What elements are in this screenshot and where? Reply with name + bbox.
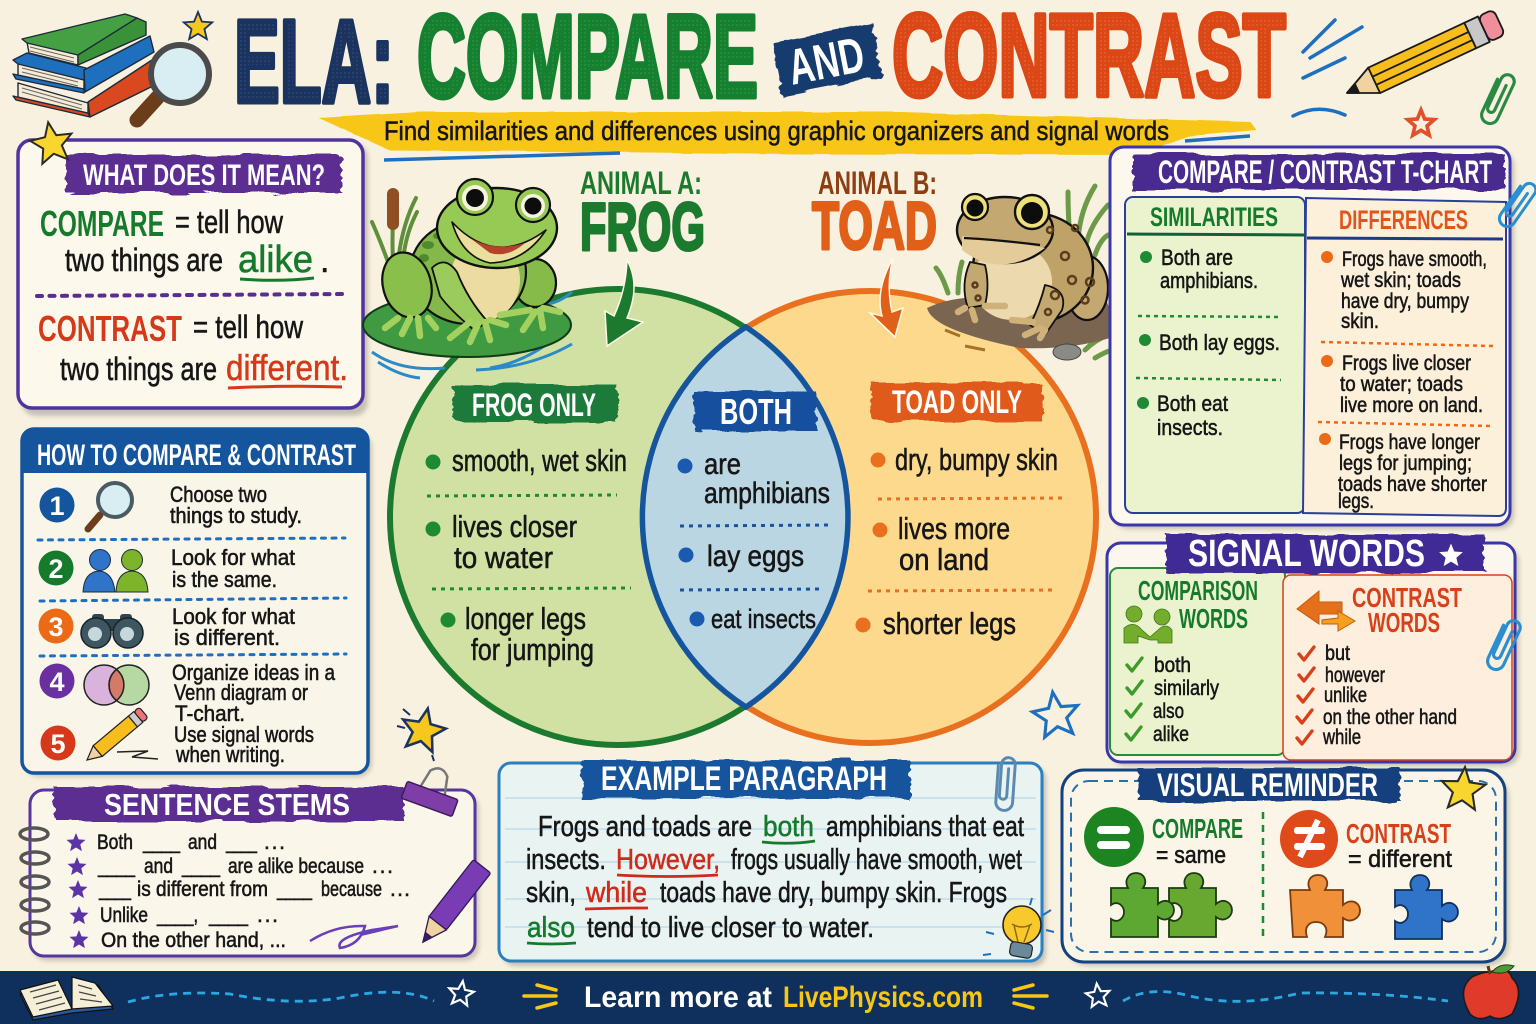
footer bar	[0, 971, 1536, 1024]
step 2: Look for what	[171, 545, 295, 570]
column: comparison words	[1110, 568, 1285, 755]
illustration: toad on rock	[927, 194, 1112, 360]
circle: toad	[644, 291, 1096, 743]
column: similarities: Both lay eggs.	[1159, 330, 1280, 355]
contrast side: CONTRAST	[1346, 818, 1451, 849]
both list: are	[704, 448, 741, 481]
step 4: T-chart.	[175, 701, 245, 726]
frog list: to water	[454, 540, 553, 575]
heading: animal B toad: ANIMAL B:	[818, 165, 937, 201]
heading: sentence stems: SENTENCE STEMS	[104, 787, 350, 822]
step 4	[40, 660, 336, 726]
definition: compare	[40, 203, 329, 281]
step 2	[38, 545, 295, 592]
stem list: ____	[276, 878, 312, 901]
step 2: 2	[48, 554, 64, 584]
contrast side	[1280, 810, 1458, 939]
column: comparison words: also	[1153, 700, 1184, 723]
frog list: longer legs	[465, 601, 586, 636]
both list: amphibians	[704, 477, 830, 510]
both list: lay eggs	[707, 540, 804, 573]
both list	[678, 448, 832, 634]
column: comparison words: WORDS	[1179, 603, 1248, 634]
toad list	[856, 442, 1066, 641]
icon: light bulb	[983, 898, 1054, 959]
column: differences: Frogs live closer	[1342, 352, 1471, 375]
column: contrast words: on the other hand	[1323, 706, 1457, 729]
column: differences: to water; toads	[1340, 373, 1463, 396]
icon: small venn diagram	[84, 665, 149, 705]
stem list: ____,	[156, 904, 198, 927]
motion strokes	[1293, 20, 1362, 116]
stem list: Unlike	[100, 904, 148, 927]
definition: compare: COMPARE	[40, 203, 164, 244]
label: toad only: TOAD ONLY	[892, 384, 1022, 420]
icon: yellow star on reminder	[1440, 765, 1487, 810]
paragraph text: also	[527, 912, 575, 944]
toad list: dry, bumpy skin	[895, 442, 1058, 477]
icon: green paperclip	[1479, 71, 1516, 126]
paragraph text: Frogs and toads are	[538, 811, 752, 843]
column: differences: DIFFERENCES	[1339, 205, 1468, 235]
compare side	[1084, 807, 1243, 937]
column: contrast words	[1283, 575, 1512, 760]
frog list	[426, 443, 631, 667]
compare side: = same	[1156, 842, 1226, 869]
title badge: AND: AND	[784, 26, 869, 96]
stem list: ...	[264, 831, 285, 854]
definition: contrast: CONTRAST	[38, 308, 182, 349]
stem list: ...	[257, 904, 278, 927]
both list: eat insects	[711, 604, 816, 634]
column: differences: live more on land.	[1340, 394, 1483, 417]
toad list: shorter legs	[883, 606, 1016, 641]
heading: visual reminder: VISUAL REMINDER	[1157, 767, 1378, 803]
step 4: Organize ideas in a	[172, 660, 336, 685]
column: differences: legs for jumping;	[1339, 452, 1472, 475]
subtitle band: Find similarities and differences using graphic organizers and signal words	[384, 116, 1169, 146]
column: differences: have dry, bumpy	[1341, 290, 1469, 313]
label: both: BOTH	[720, 391, 792, 432]
heading: signal words: SIGNAL WORDS	[1188, 533, 1425, 575]
definition: compare: .	[320, 242, 329, 280]
scribble	[310, 926, 398, 948]
circle: frog	[390, 289, 846, 745]
step 5	[40, 707, 314, 767]
column: similarities: Both are	[1161, 245, 1233, 270]
heading: what does it mean: WHAT DOES IT MEAN?	[83, 159, 325, 192]
step 3: 3	[48, 612, 64, 642]
step 1	[40, 482, 302, 529]
column: comparison words: COMPARISON	[1138, 575, 1258, 606]
icon: green puzzle pieces	[1111, 873, 1232, 937]
heading: how to compare	[22, 429, 368, 473]
paragraph text: insects.	[526, 844, 606, 876]
grass behind toad	[936, 186, 1112, 358]
definition: compare: = tell how	[175, 204, 284, 240]
column: similarities	[1125, 197, 1305, 513]
paragraph text: tend to live closer to water.	[587, 912, 874, 944]
title	[234, 0, 1286, 128]
stem list: ____	[225, 831, 257, 854]
stem list: ____	[181, 855, 220, 878]
heading: how to compare: HOW TO COMPARE & CONTRAST	[37, 439, 356, 472]
paragraph text: both	[763, 811, 814, 843]
stem list: are alike because	[228, 855, 364, 878]
icon: handshake people	[1124, 606, 1172, 643]
toad list: on land	[899, 542, 989, 577]
icon: opposite arrows	[1297, 591, 1355, 631]
frog list: smooth, wet skin	[452, 443, 627, 478]
panel: sentence stems	[20, 787, 479, 961]
column: differences: legs.	[1338, 490, 1374, 513]
definition: contrast: different.	[226, 347, 348, 388]
step 2: is the same.	[172, 567, 277, 592]
step 5: when writing.	[175, 742, 285, 767]
icon: two people	[83, 550, 148, 592]
column: contrast words: unlike	[1324, 684, 1367, 707]
illustration: frog on lily pad	[363, 179, 572, 378]
step 3	[38, 604, 295, 650]
column: differences: skin.	[1341, 310, 1379, 333]
contrast side: = different	[1348, 846, 1452, 873]
definition: compare: alike	[238, 239, 313, 281]
column: differences: Frogs have longer	[1339, 431, 1480, 454]
paragraph text: frogs usually have smooth, wet	[731, 844, 1022, 876]
icon: white star left	[447, 979, 475, 1006]
heading: animal A frog: ANIMAL A:	[580, 165, 702, 201]
stem list: On the other hand, ...	[101, 929, 286, 952]
icon: star top left	[184, 12, 212, 39]
stem list: ____	[142, 831, 180, 854]
panel: signal words	[1107, 533, 1519, 766]
column: comparison words: similarly	[1154, 677, 1219, 700]
label: frog only: FROG ONLY	[472, 387, 596, 423]
column: similarities: SIMILARITIES	[1150, 202, 1278, 232]
step 3: Look for what	[172, 604, 295, 629]
heading: animal A frog	[580, 165, 705, 265]
panel: how to compare and contrast	[22, 429, 372, 777]
paragraph text: amphibians that eat	[826, 811, 1024, 843]
paragraph text: However,	[616, 844, 720, 876]
definition: contrast: two things are	[60, 351, 217, 387]
stem list: and	[188, 831, 217, 854]
panel: what does it mean	[18, 140, 368, 416]
wavy line left	[128, 992, 434, 1002]
frog list: for jumping	[471, 632, 594, 667]
icon: white star right	[1085, 982, 1111, 1007]
step 1: Choose two	[170, 482, 267, 507]
panel: example paragraph	[499, 760, 1046, 966]
panel: compare contrast T-chart	[1110, 147, 1514, 529]
column: contrast words: however	[1325, 664, 1385, 687]
column: contrast words: WORDS	[1368, 607, 1440, 638]
toad list: lives more	[898, 511, 1010, 546]
paragraph text: toads have dry, bumpy skin. Frogs	[660, 877, 1007, 909]
subtitle band	[318, 112, 1256, 160]
icon: purple pencil	[414, 860, 491, 949]
heading: animal B toad	[812, 165, 937, 264]
icon: blue paperclip top	[1496, 179, 1536, 230]
stem list: ...	[372, 855, 393, 878]
heading: animal A frog: FROG	[580, 189, 705, 265]
column: differences: Frogs have smooth,	[1342, 248, 1487, 271]
arrow: to toad circle	[870, 258, 903, 337]
icon: yellow star on panel	[28, 119, 76, 165]
venn diagram	[390, 289, 1096, 745]
column: differences: wet skin; toads	[1340, 269, 1461, 292]
stem list: ____	[97, 855, 135, 878]
lens: both	[642, 327, 848, 707]
column: comparison words: both	[1154, 654, 1191, 677]
heading: example paragraph: EXAMPLE PARAGRAPH	[601, 760, 887, 798]
icon: blue paperclip signal	[1485, 617, 1522, 672]
icon: red star	[1408, 110, 1434, 135]
icon: blue puzzle piece	[1395, 875, 1458, 939]
paragraph text: while	[585, 877, 647, 909]
icon: small pencil	[83, 707, 148, 765]
column: differences	[1303, 198, 1506, 516]
stem list: Both	[97, 831, 133, 854]
heading: what does it mean	[66, 155, 342, 193]
column: differences: toads have shorter	[1338, 473, 1487, 496]
icon: binoculars	[81, 614, 143, 648]
icon: magnifying glass	[137, 45, 209, 120]
icon: binder clip	[401, 760, 466, 817]
panel: visual reminder	[1062, 767, 1509, 966]
frog list: lives closer	[452, 509, 577, 544]
accent dashes right	[1014, 985, 1047, 1008]
step 4: 4	[49, 667, 65, 697]
column: contrast words: but	[1325, 642, 1350, 665]
arrow: to frog circle	[605, 260, 643, 346]
step 5: 5	[50, 729, 66, 759]
compare side: COMPARE	[1152, 813, 1243, 844]
step 1: things to study.	[170, 503, 302, 528]
label: frog only	[453, 385, 618, 423]
column: contrast words: CONTRAST	[1352, 582, 1462, 613]
icon: pencil top right	[1341, 9, 1505, 106]
stem list: ...	[390, 878, 410, 901]
step 1: 1	[49, 491, 65, 521]
icon: open book	[20, 977, 113, 1020]
icon: blue outline star	[1030, 689, 1081, 738]
icon: cattail	[372, 188, 417, 262]
stem list: ____	[98, 878, 131, 901]
icon: yellow star accent	[397, 704, 449, 761]
column: contrast words: while	[1322, 726, 1361, 749]
icon: paperclip on paragraph	[995, 757, 1016, 811]
stem list: and	[144, 855, 173, 878]
footer link text: LivePhysics.com	[783, 981, 983, 1014]
spiral rings	[20, 828, 49, 934]
column: similarities: amphibians.	[1160, 268, 1258, 293]
footer link text: Learn more at	[584, 981, 772, 1014]
paragraph text	[526, 811, 1024, 944]
heading: animal B toad: TOAD	[812, 188, 937, 264]
accent dashes left	[524, 985, 556, 1008]
icon: orange puzzle piece	[1290, 875, 1360, 937]
column: comparison words: alike	[1153, 723, 1189, 746]
icon: magnifier	[88, 483, 132, 529]
definition: contrast	[38, 308, 348, 388]
icon: apple	[1463, 965, 1518, 1019]
stem list	[66, 831, 410, 952]
definition: contrast: = tell how	[193, 309, 304, 345]
stem list: because	[321, 878, 382, 901]
definition: compare: two things are	[65, 242, 223, 278]
step 5: Use signal words	[174, 722, 314, 747]
stem list: is different from	[137, 878, 268, 901]
paragraph text: skin,	[526, 877, 576, 909]
step 4: Venn diagram or	[174, 680, 308, 705]
column: similarities: insects.	[1157, 415, 1223, 440]
column: similarities: Both eat	[1157, 391, 1228, 416]
stem list: ____	[208, 904, 248, 927]
footer link text	[584, 981, 983, 1014]
icon: stack of books	[13, 14, 155, 117]
step 3: is different.	[174, 625, 280, 650]
wavy line right	[1123, 992, 1448, 1001]
